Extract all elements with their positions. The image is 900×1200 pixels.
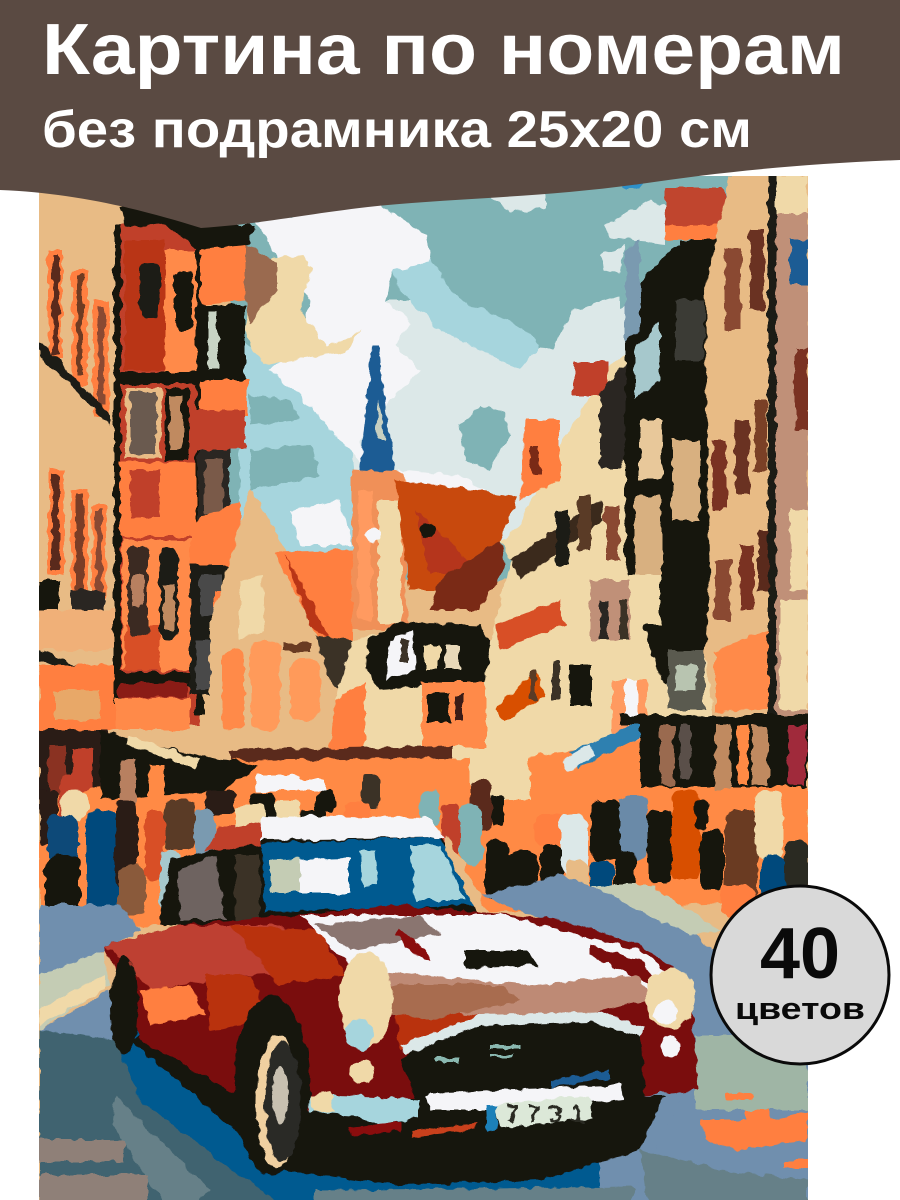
car cabin bbox=[160, 835, 490, 925]
hood highlights bbox=[300, 913, 665, 990]
subtitle: без подрамника 25х20 см bbox=[42, 101, 752, 159]
front fender headlight bbox=[340, 952, 392, 1048]
red car: 7 7 3 1 bbox=[505, 1101, 585, 1128]
banner shape bbox=[0, 0, 900, 228]
rear wheel bbox=[110, 955, 138, 1055]
car body bbox=[105, 905, 698, 1115]
title: Картина по номерам bbox=[42, 10, 845, 90]
badge label: цветов bbox=[735, 991, 865, 1026]
badge circle bbox=[711, 886, 889, 1064]
badge number: 40 bbox=[760, 914, 840, 994]
header banner bbox=[0, 0, 900, 228]
left buildings bbox=[39, 206, 278, 795]
front wheel bbox=[234, 996, 310, 1176]
car shadow and underside bbox=[132, 1034, 666, 1186]
badge: 40 colours bbox=[711, 886, 889, 1064]
red car bbox=[105, 815, 698, 1185]
crowded street bbox=[39, 715, 808, 930]
central church with spire bbox=[210, 346, 518, 762]
road surface bbox=[39, 875, 830, 1200]
right buildings bbox=[485, 176, 808, 770]
painting: city street with red car bbox=[20, 160, 830, 1200]
sky with clouds bbox=[230, 160, 750, 580]
red tower bbox=[118, 225, 200, 725]
grille bbox=[401, 1020, 646, 1098]
bumper and plate bbox=[305, 1095, 420, 1125]
